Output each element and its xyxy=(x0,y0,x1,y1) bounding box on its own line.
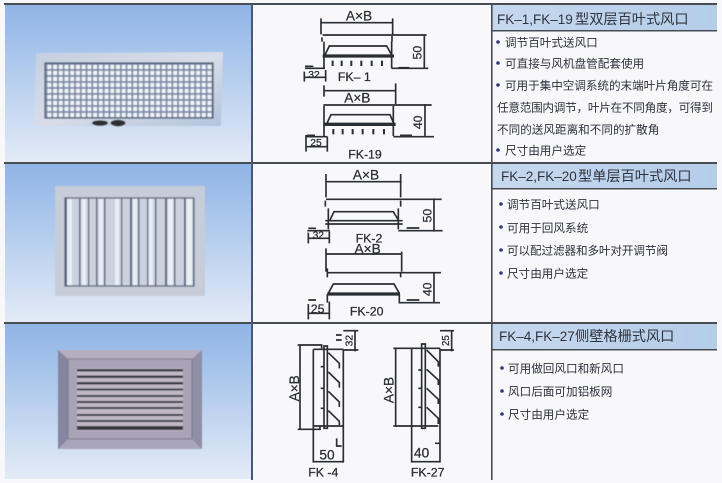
panel: drawing FK-2: FK-2 xyxy=(356,231,382,245)
heading: FK-2, FK-20: 型单层百叶式风口 xyxy=(578,169,692,185)
heading: FK-2, FK-20: FK–2,FK–20 xyxy=(501,169,577,184)
text block: FK-2 features: 可以配过滤器和多叶对开调节阀 xyxy=(507,244,668,258)
text block: FK-4 features: 尺寸由用户选定 xyxy=(508,408,590,422)
text block: FK-1 features xyxy=(496,36,713,158)
heading: FK-4, FK-27: FK–4,FK–27 xyxy=(499,329,575,344)
panel: drawing FK-2 xyxy=(307,167,443,245)
panel: drawing FK-1: 32 xyxy=(308,70,320,81)
panel: drawing FK-27: A×B xyxy=(381,377,396,403)
text block: FK-2 features: 尺寸由用户选定 xyxy=(507,266,589,280)
panel: drawing FK-1: A×B xyxy=(346,9,372,24)
text block: FK-1 features: 尺寸由用户选定 xyxy=(505,144,587,158)
panel: photo FK-4 / FK-27 side-wall grille xyxy=(5,324,251,479)
text block: FK-4 features: 可用做回风口和新风口 xyxy=(508,362,624,376)
text block: FK-4 features xyxy=(500,362,624,422)
heading: FK-1, FK-19: 型双层百叶式风口 xyxy=(575,12,689,28)
heading: FK-1, FK-19: FK–1,FK–19 xyxy=(497,12,573,27)
panel: photo FK-1 / FK-19 double-layer louver xyxy=(5,5,251,163)
panel: drawing FK-20: FK-20 xyxy=(350,304,384,318)
panel: description FK-2 / FK-20 xyxy=(492,164,717,280)
panel: drawing FK-2: 32 xyxy=(313,231,324,242)
panel: drawing FK-4: FK -4 xyxy=(308,465,339,479)
panel: drawing FK-27: FK-27 xyxy=(411,465,445,479)
text block: FK-2 features xyxy=(499,198,668,280)
panel: drawing FK-1: 50 xyxy=(411,46,425,60)
panel: description FK-1 / FK-19 xyxy=(492,5,717,158)
icon: vertical slat grille photo xyxy=(55,186,205,296)
panel: drawing FK-19: A×B xyxy=(344,91,370,106)
panel: description FK-4 / FK-27 xyxy=(492,324,717,422)
panel: drawing FK-20 xyxy=(308,241,441,319)
text block: FK-2 features: 调节百叶式送风口 xyxy=(507,198,600,212)
panel: drawing FK-27: 25 xyxy=(441,335,452,346)
panel: drawing FK-20: 25 xyxy=(311,302,325,316)
icon: horizontal louver grille photo xyxy=(58,350,202,449)
panel: drawing FK-2: 50 xyxy=(421,209,435,223)
panel: drawing FK-19: 40 xyxy=(411,115,425,129)
panel: drawing FK-19 xyxy=(306,83,434,162)
panel: drawing FK-27: 40 xyxy=(414,446,430,461)
text block: FK-2 features: 可用于回风系统 xyxy=(507,222,589,235)
panel: drawing FK-4: 32 xyxy=(345,335,356,346)
text block: FK-1 features: 可用于集中空调系统的末端叶片角度可在 xyxy=(505,78,713,92)
icon: double-layer grille photo xyxy=(34,52,223,126)
panel: drawing FK-1: FK– 1 xyxy=(338,70,371,84)
panel: drawing FK-19: 25 xyxy=(310,138,322,149)
text block: FK-1 features: 调节百叶式送风口 xyxy=(505,36,598,50)
panel: drawing FK-27 xyxy=(381,330,454,479)
text block: FK-1 features: 任意范围内调节，叶片在不同角度，可得到 xyxy=(497,100,713,114)
text block: FK-4 features: 风口后面可加铝板网 xyxy=(508,384,612,398)
panel: photo FK-2 / FK-20 single-layer louver xyxy=(5,164,251,323)
text block: FK-1 features: 可直接与风机盘管配套使用 xyxy=(505,56,644,70)
panel: drawing FK-4 xyxy=(287,330,358,479)
panel: drawing FK-1 xyxy=(304,9,428,84)
panel: drawing FK-2: A×B xyxy=(353,167,379,182)
heading: FK-4, FK-27: 侧壁格栅式风口 xyxy=(575,329,674,345)
panel: drawing FK-19: FK-19 xyxy=(348,148,382,162)
panel: drawing FK-20: A×B xyxy=(355,241,381,256)
text block: FK-1 features: 不同的送风距离和不同的扩散角 xyxy=(497,122,659,136)
panel: drawing FK-4: A×B xyxy=(287,375,302,401)
panel: drawing FK-20: 40 xyxy=(421,282,435,296)
panel: drawing FK-4: 50 xyxy=(319,447,335,462)
